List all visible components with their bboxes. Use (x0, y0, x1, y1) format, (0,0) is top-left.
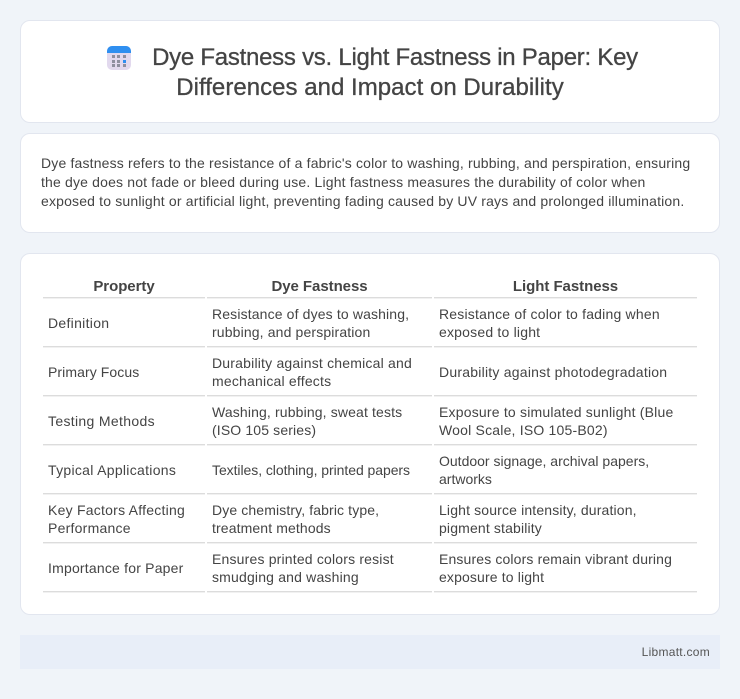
comparison table panel (20, 253, 720, 615)
intro text (41, 155, 690, 209)
row: Primary Focus: Durability against chemical and (212, 355, 412, 371)
row: Key Factors: Dye chemistry, fabric type, (212, 502, 379, 518)
row: Primary Focus: Durability against photodegradation (439, 364, 667, 380)
table header row: Dye Fastness (271, 278, 368, 295)
row: Testing Methods (48, 404, 673, 438)
row: Importance for Paper: exposure to light (439, 569, 544, 585)
row: Definition: rubbing, and perspiration (212, 324, 370, 340)
row: Primary Focus: Primary Focus (48, 364, 139, 380)
intro paragraph panel (20, 133, 720, 233)
row: Testing Methods: Wool Scale, ISO 105-B02) (439, 422, 608, 438)
row: Importance for Paper: Ensures printed colors resist (212, 551, 394, 567)
intro text: the dye does not fade or bleed during use. Light fastness measures the durability of color when (41, 174, 646, 190)
row: Key Factors: Light source intensity, duration, (439, 502, 637, 518)
row: Key Factors: Key Factors Affecting (48, 502, 185, 518)
title: Differences and Impact on Durability (176, 74, 564, 101)
row: Typical Applications: Textiles, clothing, printed papers (212, 462, 410, 478)
footer bar (20, 635, 720, 669)
title (152, 44, 638, 101)
row: Importance for Paper: Ensures colors remain vibrant during (439, 551, 672, 567)
row: Testing Methods: (ISO 105 series) (212, 422, 316, 438)
row: Importance for Paper: smudging and washing (212, 569, 359, 585)
icon: calendar (107, 46, 131, 70)
header panel (20, 20, 720, 123)
row: Testing Methods: Exposure to simulated sunlight (Blue (439, 404, 673, 420)
row: Importance for Paper (48, 551, 672, 585)
row: Primary Focus: mechanical effects (212, 373, 331, 389)
row: Testing Methods: Testing Methods (48, 413, 155, 429)
intro text: exposed to sunlight or artificial light, preventing fading caused by UV rays and prolonged illumination. (41, 193, 684, 209)
row: Definition: exposed to light (439, 324, 540, 340)
row: Definition: Definition (48, 315, 109, 331)
row: Typical Applications: Outdoor signage, archival papers, (439, 453, 649, 469)
footer credit: Libmatt.com (642, 645, 710, 659)
table header row: Light Fastness (513, 278, 618, 295)
row: Definition: Resistance of color to fading when (439, 306, 660, 322)
row: Primary Focus (48, 355, 667, 389)
row: Testing Methods: Washing, rubbing, sweat tests (212, 404, 402, 420)
row: Importance for Paper: Importance for Paper (48, 560, 184, 576)
table header row (93, 278, 618, 295)
row: Key Factors (48, 502, 637, 536)
row: Definition: Resistance of dyes to washing, (212, 306, 409, 322)
row: Typical Applications: artworks (439, 471, 492, 487)
title: Dye Fastness vs. Light Fastness in Paper: Key (152, 44, 638, 71)
row: Key Factors: Performance (48, 520, 131, 536)
row: Typical Applications: Typical Applications (48, 462, 176, 478)
row: Definition (48, 306, 660, 340)
row: Typical Applications (48, 453, 649, 487)
row: Key Factors: pigment stability (439, 520, 542, 536)
table header row: Property (93, 278, 155, 295)
intro text: Dye fastness refers to the resistance of a fabric's color to washing, rubbing, and perspiration, ensuring (41, 155, 690, 171)
row: Key Factors: treatment methods (212, 520, 331, 536)
